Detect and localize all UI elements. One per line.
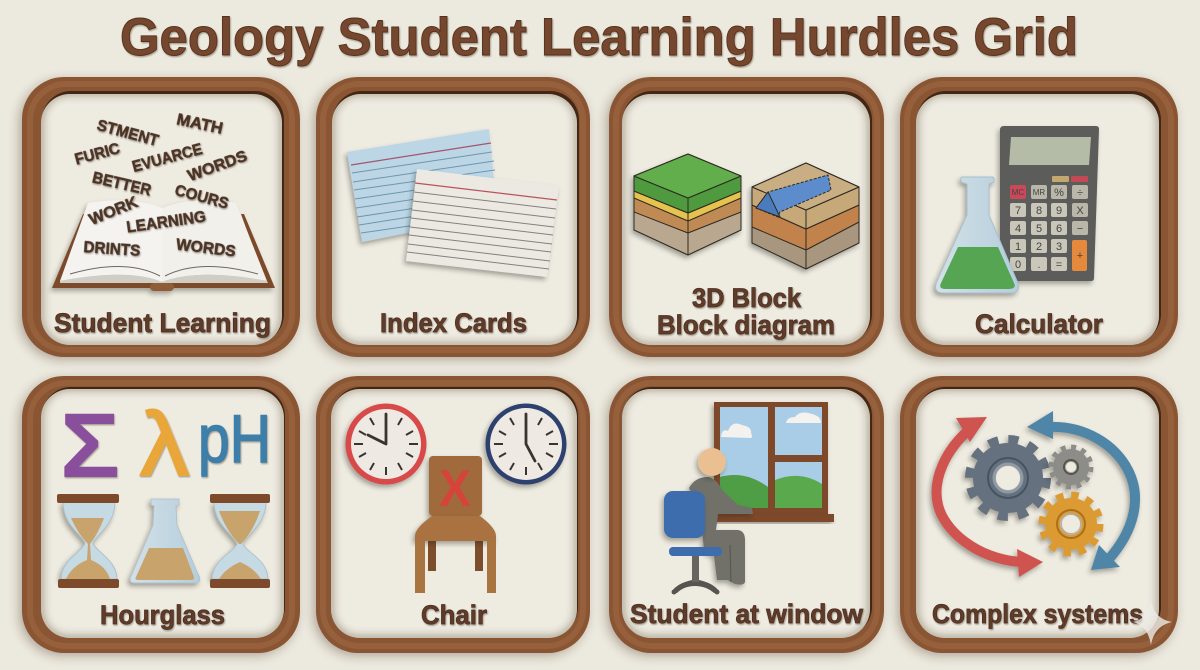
floating words: FURIC xyxy=(73,140,122,169)
icon: calculator: 8 xyxy=(1036,205,1042,217)
icon: chair xyxy=(415,456,496,593)
panel: chair xyxy=(316,376,590,653)
panel: hourglass xyxy=(22,376,300,653)
icon: calculator: 0 xyxy=(1015,259,1021,271)
icon: student on office chair xyxy=(664,448,753,594)
icon: green flask xyxy=(936,177,1018,293)
floating words: DRINTS xyxy=(83,239,141,260)
icon: calculator: . xyxy=(1037,259,1041,271)
icon: right block with fold xyxy=(752,163,859,269)
icon: calculator: ÷ xyxy=(1077,187,1083,199)
icon: small grey gear xyxy=(1051,447,1091,487)
panel: complex systems xyxy=(900,376,1178,653)
icon: large grey gear xyxy=(970,440,1046,516)
panel: student learning xyxy=(22,77,300,357)
icon: right hourglass xyxy=(210,494,270,588)
label: Student Learning xyxy=(54,308,271,338)
label: Chair xyxy=(421,600,487,630)
icon: calculator: + xyxy=(1077,250,1083,262)
icon: sparkle watermark xyxy=(1133,600,1172,645)
panel: calculator xyxy=(900,77,1178,357)
label: Calculator xyxy=(975,309,1103,339)
floating words xyxy=(73,111,250,261)
floating words: COURS xyxy=(173,182,231,213)
icon: red X on chair back: X xyxy=(439,460,471,518)
icon: lambda symbol: λ xyxy=(140,395,189,495)
icon: calculator: − xyxy=(1077,223,1083,235)
icon: orange gear xyxy=(1042,495,1100,553)
icon: left hourglass xyxy=(57,494,119,588)
label: Complex systems xyxy=(932,599,1143,629)
label: Block diagram xyxy=(657,310,835,340)
icon: calculator: MR xyxy=(1033,188,1045,197)
panel: student at window xyxy=(609,376,884,653)
title: Geology Student Learning Hurdles Grid xyxy=(120,8,1078,67)
icon: red clock xyxy=(346,404,426,484)
floating words: MATH xyxy=(175,111,224,138)
floating words: WORDS xyxy=(175,236,237,261)
icon: window xyxy=(714,402,834,522)
icon: sigma symbol: Σ xyxy=(60,395,120,497)
icon: calculator: 1 xyxy=(1015,241,1021,253)
arrow: blue circular xyxy=(1027,411,1135,570)
icon: blue index card xyxy=(347,129,497,242)
icon: calculator: 3 xyxy=(1056,241,1062,253)
icon: pH symbol: pH xyxy=(198,401,271,477)
label: Hourglass xyxy=(100,600,225,630)
floating words: STMENT xyxy=(95,117,160,150)
icon: calculator: 7 xyxy=(1015,205,1021,217)
icon: calculator: = xyxy=(1056,259,1062,271)
icon: open book xyxy=(52,200,275,291)
label: 3D Block xyxy=(692,283,802,313)
arrow: red circular xyxy=(937,417,1043,577)
icon: calculator: % xyxy=(1054,187,1064,199)
icon: calculator: MC xyxy=(1012,188,1024,197)
icon: calculator: 4 xyxy=(1015,223,1021,235)
panel: index cards xyxy=(316,77,590,357)
floating words: EVUARCE xyxy=(130,141,205,176)
icon: calculator: 6 xyxy=(1056,223,1062,235)
icon: calculator: X xyxy=(1076,205,1084,217)
label: Index Cards xyxy=(380,308,527,338)
floating words: WORK xyxy=(87,194,141,229)
label: Student at window xyxy=(630,599,864,629)
icon: left block xyxy=(634,154,741,255)
icon: sand flask xyxy=(130,499,200,583)
icon: white index card xyxy=(406,169,559,277)
icon: calculator: 2 xyxy=(1036,241,1042,253)
icon: calculator xyxy=(1000,126,1099,281)
floating words: WORDS xyxy=(185,148,250,185)
icon: calculator: 5 xyxy=(1036,223,1042,235)
floating words: BETTER xyxy=(91,169,153,200)
floating words: LEARNING xyxy=(125,209,207,236)
icon: calculator: 9 xyxy=(1056,205,1062,217)
label xyxy=(657,283,835,340)
icon: navy clock xyxy=(486,404,566,484)
panel: 3D block diagram xyxy=(609,77,884,357)
